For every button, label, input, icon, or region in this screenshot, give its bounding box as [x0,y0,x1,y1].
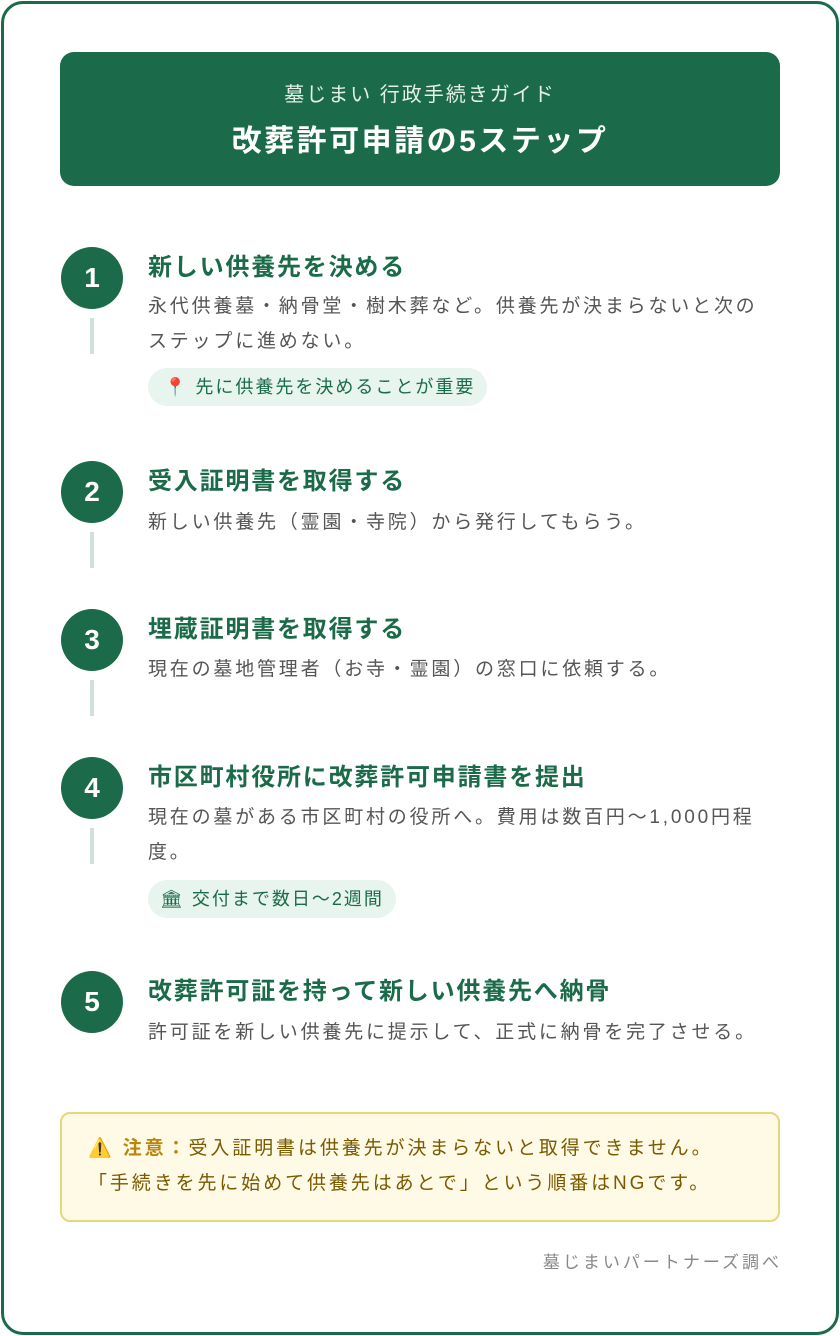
tag: pin [148,368,487,406]
number circle 4 [61,757,123,819]
header banner [60,52,780,186]
warning callout: 「手続きを先に始めて供養先はあとで」という順番はNGです。 [88,1173,711,1194]
step 1 title: 新しい供養先を決める [148,254,406,281]
step 1 body: ステップに進めない。 [148,331,366,352]
step 1 [61,247,757,406]
step 4 body: 度。 [148,842,192,863]
step 4 title: 市区町村役所に改葬許可申請書を提出 [148,764,587,791]
number circle 1: 1 [84,262,100,293]
tag: pin: 📍 先に供養先を決めることが重要 [164,377,475,397]
step 4 [61,757,755,918]
number circle 1 [61,247,123,309]
number circle 3 [61,609,123,671]
warning callout [60,1112,780,1222]
warning callout: ⚠️ 注意：受入証明書は供養先が決まらないと取得できません。 [88,1138,714,1159]
tag: office [148,880,396,918]
number circle 5: 5 [84,986,100,1017]
title: 改葬許可申請の5ステップ [232,125,608,158]
step 5 body: 許可証を新しい供養先に提示して、正式に納骨を完了させる。 [148,1022,757,1043]
tag: office: 🏛 交付まで数日〜2週間 [160,889,384,909]
step 5 [61,971,757,1043]
step 2 [61,461,647,568]
step 3 body: 現在の墓地管理者（お寺・霊園）の窓口に依頼する。 [148,659,671,680]
step 5 title: 改葬許可証を持って新しい供養先へ納骨 [148,978,611,1005]
step 2 body: 新しい供養先（霊園・寺院）から発行してもらう。 [148,512,647,533]
step 4 body [148,806,755,863]
step 3 title: 埋蔵証明書を取得する [148,616,406,643]
number circle 2: 2 [84,476,100,507]
step 1 body [148,296,757,352]
number circle 5 [61,971,123,1033]
step 2 title: 受入証明書を取得する [148,468,406,495]
step 3 [61,609,671,716]
number circle 4: 4 [84,772,100,803]
number circle 2 [61,461,123,523]
step 4 body: 現在の墓がある市区町村の役所へ。費用は数百円〜1,000円程 [148,807,755,828]
step 1 body: 永代供養墓・納骨堂・樹木葬など。供養先が決まらないと次の [148,296,757,317]
subtitle: 墓じまい 行政手続きガイド [284,84,556,106]
source footer: 墓じまいパートナーズ調べ [543,1253,782,1272]
number circle 3: 3 [84,624,100,655]
